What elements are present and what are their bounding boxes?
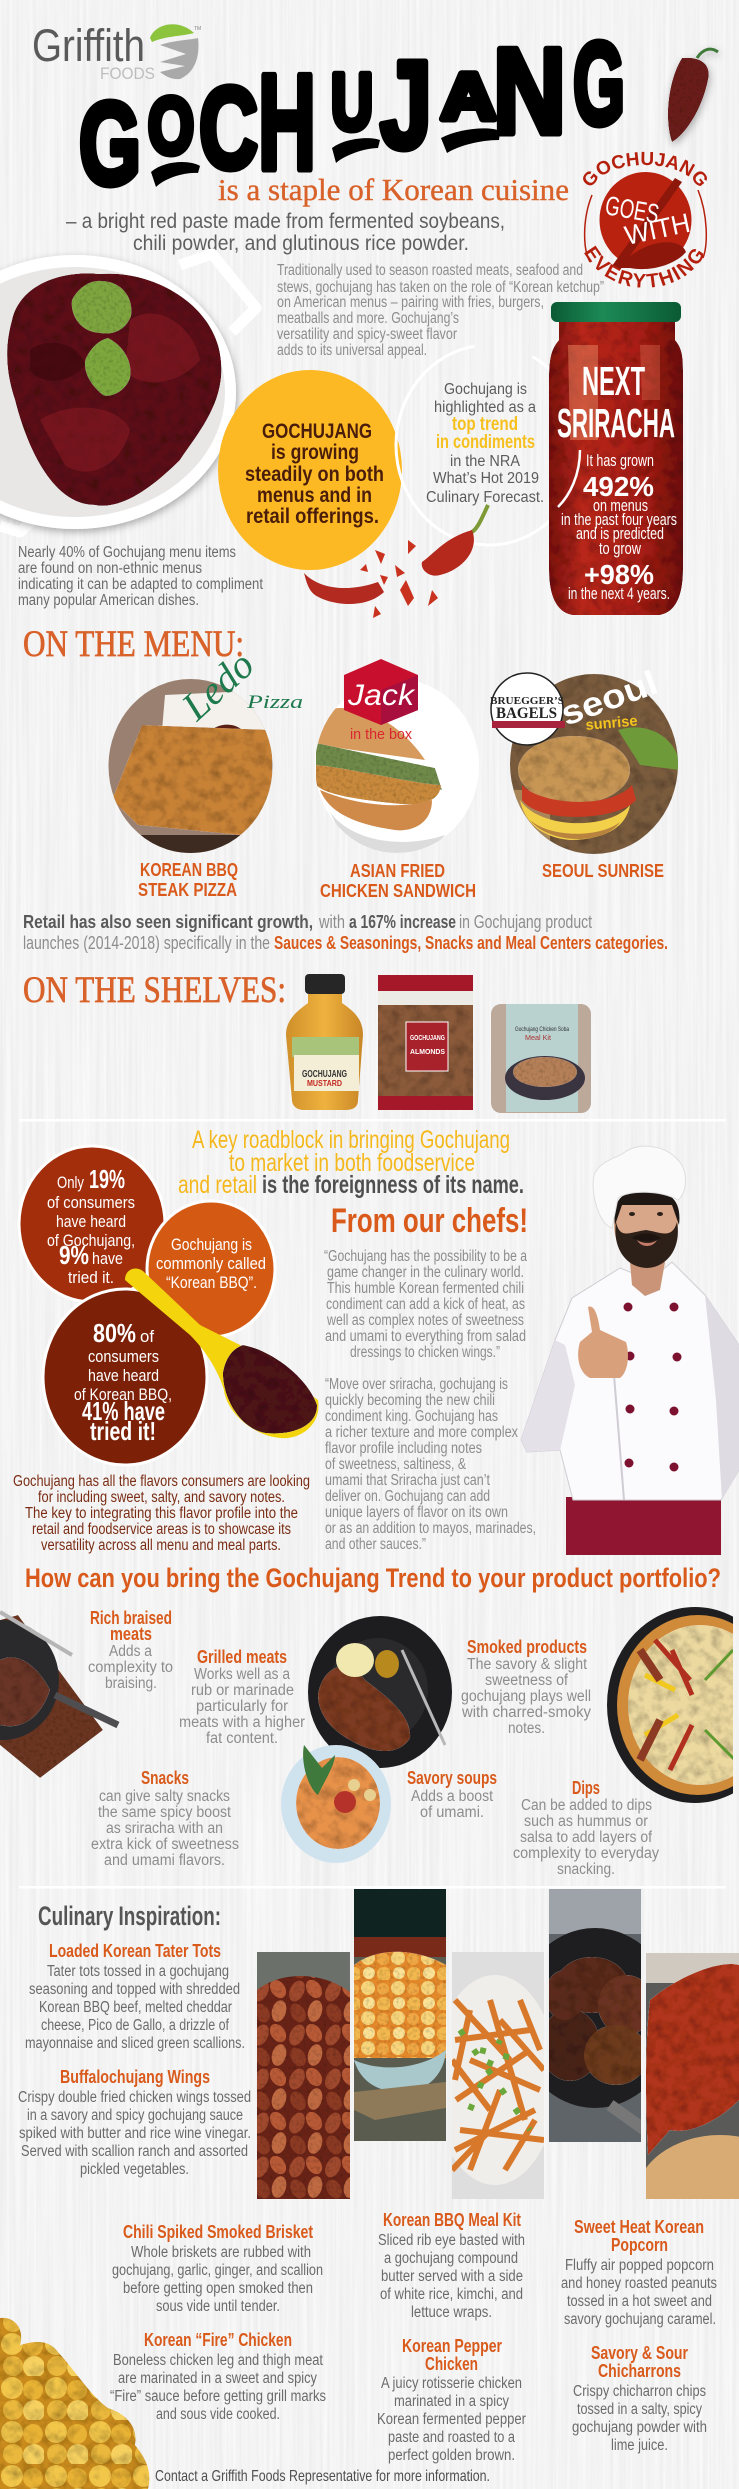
text: traditionally used: on American menus – pairing with fries, burgers, [277,294,544,311]
image: Jack in the box sandwich: Jack [347,679,416,712]
callout: NRA trend: in condiments [436,432,535,453]
photo: popcorn bowl [354,1889,446,2141]
image: jar of sauce with stats: NEXT [582,358,645,404]
image: jar of sauce with stats: It has grown [586,451,654,470]
callout: NRA trend: Gochujang is [444,381,527,398]
badge: Gochujang goes with everything: GOES [603,190,661,229]
text: chef quote 2: condiment king. Gochujang has [325,1408,498,1425]
text: contact line: Contact a Griffith Foods Representative for more information. [155,2468,490,2485]
text: buffalochujang wings: pickled vegetables. [80,2161,189,2178]
callout: growing steadily [218,370,402,570]
text: smoked products: The savory & slight [467,1656,588,1673]
text: savory soups: Savory soups [407,1768,497,1788]
text: grilled meats: particularly for [196,1698,288,1715]
heading: key roadblock: to market in both foodservice [229,1149,475,1177]
circle: 80% [43,1289,207,1465]
image: grilled steak plate [308,1616,452,1768]
circle: only 19%: 9% [59,1240,89,1270]
image: Jack in the box sandwich [315,659,479,853]
callout: growing steadily: retail offerings. [246,505,379,528]
divider [19,1886,726,1888]
circle: 80%: have heard [88,1366,159,1385]
text: korean bbq meal kit: Sliced rib eye basted with [378,2232,525,2249]
circle: only 19% [19,1146,165,1302]
title: GOCHUJANG: H [258,46,316,198]
text: chef quote 1 [324,1248,527,1361]
text: korean pepper chicken: paste and roasted to a [388,2429,515,2446]
callout: NRA trend: in the NRA [450,453,521,470]
text: snacks: as sriracha with an [106,1820,223,1837]
text: chef quote 2: and other sauces.” [325,1536,426,1553]
text: korean pepper chicken: Chicken [425,2354,478,2374]
text: flavors consumers: retail and foodservice areas is to showcase its [32,1521,291,1538]
text: dips: Can be added to dips [521,1797,652,1814]
text: korean pepper chicken: marinated in a spicy [394,2393,509,2410]
text: grilled meats: meats with a higher [179,1714,305,1731]
text: smoked products: with charred-smoky [461,1704,591,1721]
heading: on the shelves: ON THE SHELVES: [23,970,286,1011]
labels: menu items: SEOUL SUNRISE [542,861,664,881]
text: snacks: the same spicy boost [98,1804,232,1821]
circle: commonly called Korean BBQ: commonly called [156,1254,266,1273]
image: chef [521,1146,739,1555]
circle: commonly called Korean BBQ [147,1201,275,1337]
circle: only 19%: have heard [56,1212,126,1231]
text: loaded tater tots: mayonnaise and sliced green scallions. [25,2035,245,2052]
text: savory soups [407,1768,497,1821]
image: Bruegger's Seoul Sunrise: seoul [556,664,663,734]
text: korean bbq meal kit: butter served with a side [381,2268,523,2285]
text: chef quote 2: flavor profile including notes [325,1440,482,1457]
circle: only 19%: have [92,1249,123,1268]
badge: Gochujang goes with everything: WITH [622,208,693,251]
text: smoked products: gochujang plays well [461,1688,591,1705]
photo: chicken in skillet [549,1889,641,2142]
image: jar of sauce with stats: to grow [599,539,642,558]
text: chef quote 2: unique layers of flavor on its own [325,1504,508,1521]
heading: key roadblock: A key roadblock in bringing Gochujang [192,1126,510,1154]
title: GOCHUJANG: O [148,81,194,170]
image: pizza [607,1607,739,1803]
labels: menu items [138,860,664,901]
circle: commonly called Korean BBQ: “Korean BBQ”. [166,1273,257,1292]
text: rich braised meats: meats [110,1624,152,1644]
image: Bruegger's Seoul Sunrise: BRUEGGER’S [490,695,564,707]
divider [19,1119,726,1122]
image: Jack in the box sandwich: in the box [350,726,412,743]
text: savory sour chicharrons: Savory & Sour [591,2343,688,2363]
labels: menu items: ASIAN FRIED [350,861,445,881]
text: sweet heat popcorn [561,2217,717,2328]
labels: menu items: CHICKEN SANDWICH [320,881,476,901]
text: traditionally used: Traditionally used to season roasted meats, seafood and [277,262,583,279]
text: sweet heat popcorn: Fluffy air popped popcorn [565,2257,714,2274]
image: almonds bag [378,975,473,1110]
image: jar of sauce with stats: in the next 4 years. [568,584,670,603]
heading: on the menu: ON THE MENU: [23,624,244,665]
image: meal kit: Gochujang Chicken Soba [515,1027,570,1033]
text: korean bbq meal kit: of white rice, kimchi, and [380,2286,523,2303]
text: flavors consumers: versatility across all menu and meal parts. [41,1537,281,1554]
text: korean bbq meal kit [378,2210,525,2321]
text: traditionally used: versatility and spicy-sweet flavor [277,326,457,343]
text: korean bbq meal kit: a gochujang compound [384,2250,518,2267]
circle: 80%: 80% [93,1318,136,1348]
heading: key roadblock [178,1126,524,1199]
subtitle [66,172,569,255]
callout: growing steadily: is growing [271,441,359,464]
text: smoked products [461,1637,591,1737]
text: chef quote 2: quickly becoming the new chili [325,1392,495,1409]
logo: Griffith Foods: Griffith [32,20,145,71]
text: buffalochujang wings: in a savory and spicy gochujang sauce [27,2107,243,2124]
text: nearly 40 percent: Nearly 40% of Gochujang menu items [18,544,236,561]
subtitle: is a staple of Korean cuisine [218,172,569,207]
text: korean fire chicken: and sous vide cooked. [156,2406,280,2423]
text: retail growth: with [318,912,345,932]
subtitle: chili powder, and glutinous rice powder. [133,232,469,255]
circle: only 19%: of consumers [47,1193,135,1212]
text: dips [513,1778,659,1878]
text: dips: such as hummus or [524,1813,648,1830]
text: chef quote 1: “Gochujang has the possibility to be a [324,1248,527,1265]
text: snacks: extra kick of sweetness [91,1836,239,1853]
callout: NRA trend: highlighted as a [434,399,536,416]
text: korean pepper chicken: perfect golden brown. [388,2447,515,2464]
text: chili spiked brisket: before getting open smoked then [123,2280,313,2297]
image: Bruegger's Seoul Sunrise: sunrise [585,713,638,734]
text: savory sour chicharrons: Chicharrons [598,2361,681,2381]
text: rich braised meats: Adds a [109,1643,152,1660]
image: Bruegger's Seoul Sunrise [490,664,685,860]
heading: from our chefs: From our chefs! [331,1202,528,1240]
title: GOCHUJANG: G [79,78,141,209]
image: Ledo pizza: Ledo [172,642,262,729]
text: retail growth: in Gochujang product [459,912,592,932]
circle: 80%: 41% have [82,1396,165,1426]
circle: only 19%: 19% [89,1164,125,1194]
text: rich braised meats [88,1608,173,1692]
text: grilled meats [179,1647,305,1747]
text: korean fire chicken [110,2330,326,2423]
text: chef quote 2 [325,1376,536,1553]
badge: Gochujang goes with everything: GOCHUJANG [583,152,707,186]
text: chef quote 2: a richer texture and more complex [325,1424,518,1441]
text: dips: salsa to add layers of [520,1829,653,1846]
title: GOCHUJANG: G [573,18,625,149]
text: snacks: and umami flavors. [104,1852,225,1869]
text: grilled meats: Grilled meats [197,1647,287,1667]
text: loaded tater tots: Loaded Korean Tater Tots [49,1941,221,1961]
text: loaded tater tots: cheese, Pico de Gallo, a drizzle of [41,2017,230,2034]
text: sweet heat popcorn: tossed in a hot sweet and [567,2293,712,2310]
image: jar of sauce with stats [549,302,683,615]
image: soup bowl [281,1745,391,1863]
text: grilled meats: rub or marinade [191,1682,294,1699]
badge: Gochujang goes with everything [583,152,708,288]
title: GOCHUJANG: J [380,37,432,175]
title: GOCHUJANG: A [441,59,496,133]
photo: glazed almonds [257,1952,350,2199]
heading: culinary inspiration: Culinary Inspiration: [38,1901,221,1931]
text: grilled meats: fat content. [206,1730,278,1747]
image: Bruegger's Seoul Sunrise: BAGELS [496,705,557,722]
callout: NRA trend: What’s Hot 2019 [433,470,539,487]
text: dips: snacking. [557,1861,615,1878]
subtitle: – a bright red paste made from fermented soybeans, [66,210,505,233]
image: mustard bottle: MUSTARD [307,1079,342,1088]
text: retail growth: launches (2014-2018) specifically in the [23,933,270,953]
heading: key roadblock: and retail [178,1171,257,1199]
text: flavors consumers [13,1473,310,1554]
icon: red chilies and flakes [304,505,488,618]
text: chef quote 2: “Move over sriracha, gochujang is [325,1376,508,1393]
text: retail growth: a 167% increase [349,912,456,932]
text: korean pepper chicken [377,2336,526,2464]
text: nearly 40 percent: indicating it can be adapted to compliment [18,576,264,593]
image: jar of sauce with stats: in the past four years [561,510,677,529]
text: flavors consumers: Gochujang has all the flavors consumers are looking [13,1473,310,1490]
circle: 80%: tried it! [90,1416,156,1446]
text: chef quote 1: well as complex notes of sweetness [326,1312,524,1329]
circle: 80%: of [140,1327,154,1346]
text: chili spiked brisket: Chili Spiked Smoked Brisket [123,2222,313,2242]
text: flavors consumers: for including sweet, salty, and savory notes. [38,1489,285,1506]
text: traditionally used [277,262,604,359]
text: savory sour chicharrons: Crispy chicharron chips [573,2383,706,2400]
text: smoked products: Smoked products [467,1637,587,1657]
text: korean bbq meal kit: Korean BBQ Meal Kit [383,2210,521,2230]
text: chef quote 2: umami that Sriracha just can’t [325,1472,491,1489]
text: chef quote 1: This humble Korean fermented chili [327,1280,524,1297]
text: dips: complexity to everyday [513,1845,659,1862]
text: loaded tater tots [25,1941,245,2052]
text: chili spiked brisket [112,2222,323,2315]
labels: menu items: KOREAN BBQ [140,860,238,880]
circle: commonly called Korean BBQ: Gochujang is [171,1235,252,1254]
text: savory sour chicharrons: tossed in a salty, spicy [577,2401,702,2418]
image: jar of sauce with stats: and is predicted [576,524,664,543]
text: nearly 40 percent: many popular American dishes. [18,592,199,609]
text: savory sour chicharrons: lime juice. [611,2437,668,2454]
text: chili spiked brisket: sous vide until tender. [156,2298,280,2315]
circle: only 19%: tried it. [68,1268,114,1287]
text: chef quote 1: and umami to everything from salad [325,1328,526,1345]
text: chef quote 1: dressings to chicken wings.” [350,1344,500,1361]
text: chef quote 1: condiment can add a kick of heat, as [326,1296,525,1313]
text: retail growth: Retail has also seen significant growth, [23,912,313,932]
text: snacks: Snacks [141,1768,189,1788]
photo: sesame wings [646,1953,739,2199]
labels: menu items: STEAK PIZZA [138,880,237,900]
circle: only 19%: Only [57,1173,84,1192]
badge: Gochujang goes with everything: EVERYTHING [584,246,704,288]
image: Ledo pizza [108,658,302,853]
text: rich braised meats: braising. [105,1675,157,1692]
text: buffalochujang wings: spiked with butter and rice wine vinegar. [19,2125,251,2142]
text: sweet heat popcorn: Popcorn [611,2235,668,2255]
text: sweet heat popcorn: Sweet Heat Korean [574,2217,704,2237]
text: chef quote 2: or as an addition to mayos, marinades, [325,1520,536,1537]
image: mustard bottle [286,974,363,1110]
text: savory soups: Adds a boost [411,1788,494,1805]
text: chef quote 2: deliver on. Gochujang can add [325,1488,490,1505]
image: jar of sauce with stats: on menus [593,496,648,515]
title: GOCHUJANG: C [199,63,258,193]
text: chili spiked brisket: gochujang, garlic, ginger, and scallion [112,2262,323,2279]
callout: NRA trend: Culinary Forecast. [426,489,544,506]
callout: growing steadily: steadily on both [245,463,384,486]
text: savory soups: of umami. [420,1804,484,1821]
text: chef quote 1: game changer in the culinary world. [327,1264,524,1281]
image: almonds bag: GOCHUJANG [410,1035,445,1042]
image: spoon of gochujang [125,1269,318,1438]
callout: NRA trend: top trend [452,414,518,435]
text: chili spiked brisket: Whole briskets are rubbed with [131,2244,311,2261]
image: steak on board [0,1612,118,1778]
text: loaded tater tots: seasoning and topped with shredded [29,1981,240,1998]
text: buffalochujang wings: Crispy double fried chicken wings tossed [18,2089,251,2106]
text: traditionally used: meatballs and more. Gochujang’s [277,310,459,327]
text: grilled meats: Works well as a [194,1666,290,1683]
image: jar of sauce with stats: +98% [584,559,654,590]
photo: loaded fries [452,1952,544,2199]
text: smoked products: notes. [508,1720,545,1737]
text: nearly 40 percent [18,544,264,609]
text: savory sour chicharrons: gochujang powder with [572,2419,707,2436]
text: buffalochujang wings: Buffalochujang Wings [60,2067,210,2087]
circle: 80%: consumers [88,1347,159,1366]
text: korean bbq meal kit: lettuce wraps. [411,2304,492,2321]
logo: Griffith Foods: FOODS [100,64,155,83]
text: loaded tater tots: Tater tots tossed in a gochujang [47,1963,229,1980]
image: mustard bottle: GOCHUJANG [302,1069,347,1080]
text: traditionally used: stews, gochujang has taken on the role of “Korean ketchup” [277,279,604,296]
icon: dried chili top right [668,49,718,142]
text: chef quote 2: of sweetness, saltiness, & [325,1456,467,1473]
text: snacks [91,1768,239,1869]
callout: growing steadily: menus and in [257,484,372,507]
text: savory sour chicharrons [572,2343,707,2454]
text: korean fire chicken: Korean “Fire” Chicken [144,2330,292,2350]
title: GOCHUJANG [79,18,625,209]
image: caramel popcorn [0,2318,149,2489]
text: buffalochujang wings [18,2067,251,2178]
logo: Griffith Foods: TM [194,26,201,32]
text: korean fire chicken: “Fire” sauce before getting grill marks [110,2388,326,2405]
text: smoked products: sweetness of [485,1672,569,1689]
text: korean pepper chicken: Korean fermented pepper [377,2411,526,2428]
image: meal kit [491,1004,591,1113]
text: traditionally used: adds to its universal appeal. [277,342,427,359]
text: dips: Dips [572,1778,600,1798]
image: meal kit: Meal Kit [525,1035,551,1042]
callout: growing steadily: GOCHUJANG [262,420,372,443]
text: loaded tater tots: Korean BBQ beef, melted cheddar [39,1999,232,2016]
text: korean pepper chicken: A juicy rotisserie chicken [381,2375,522,2392]
image: bowl of gochujang [0,254,256,532]
heading: key roadblock: is the foreignness of its name. [262,1171,524,1199]
title: GOCHUJANG: U [331,57,373,146]
text: buffalochujang wings: Served with scallion ranch and assorted [21,2143,248,2160]
text: korean fire chicken: Boneless chicken leg and thigh meat [113,2352,324,2369]
logo: Griffith Foods [32,20,201,83]
text: korean fire chicken: are marinated in a sweet and spicy [118,2370,317,2387]
circle: 80%: of Korean BBQ, [74,1385,172,1404]
image: Ledo pizza: Pizza [246,692,303,713]
text: nearly 40 percent: are found on non-ethnic menus [18,560,202,577]
text: rich braised meats: complexity to [88,1659,173,1676]
text: rich braised meats: Rich braised [90,1608,172,1628]
title: GOCHUJANG: N [493,23,566,159]
text: snacks: can give salty snacks [99,1788,230,1805]
text: korean pepper chicken: Korean Pepper [402,2336,502,2356]
image: almonds bag: ALMONDS [410,1049,445,1056]
text: retail growth [23,912,668,953]
callout: NRA trend [396,345,582,545]
text: flavors consumers: The key to integrating this flavor profile into the [25,1505,298,1522]
circle: only 19%: of Gochujang, [47,1231,135,1250]
image: jar of sauce with stats: 492% [583,471,654,502]
